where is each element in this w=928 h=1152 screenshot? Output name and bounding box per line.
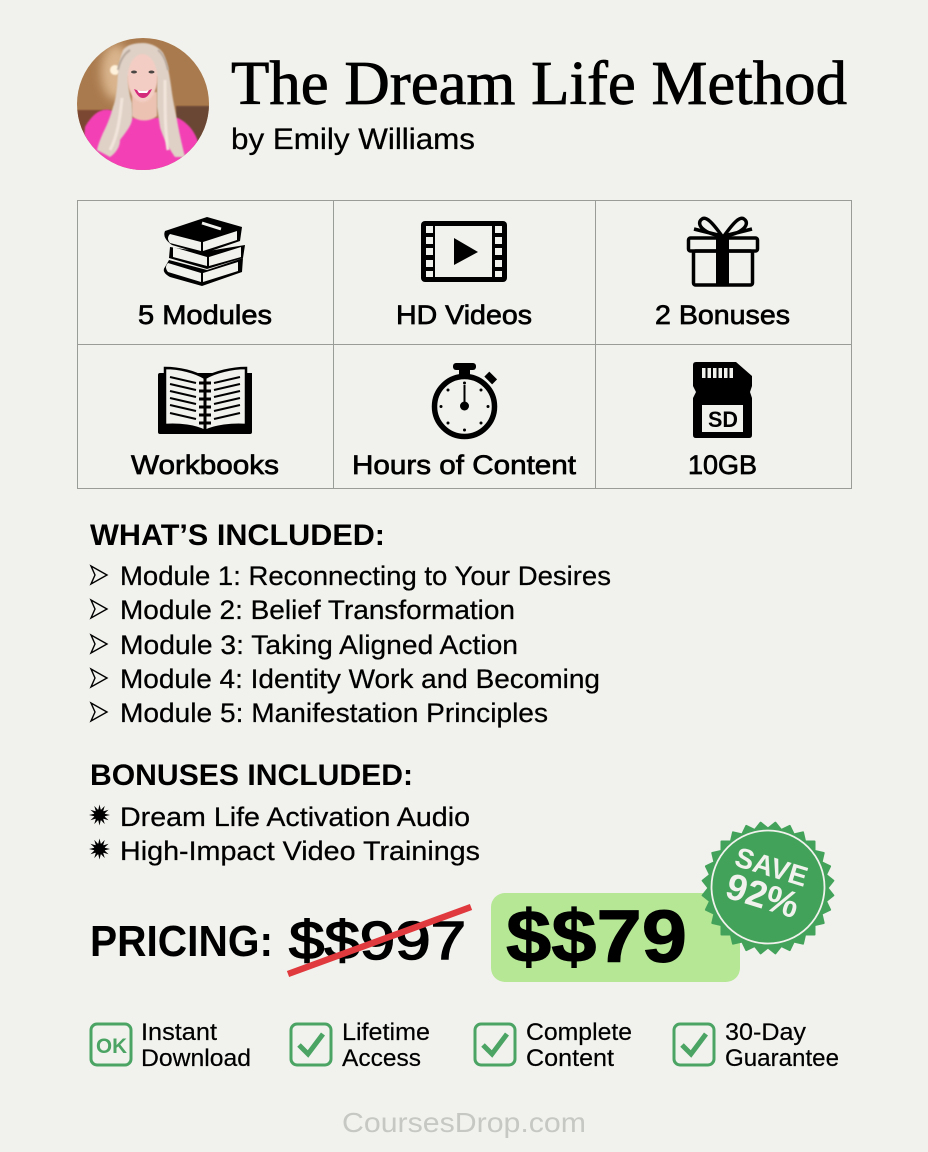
icon: open workbook bbox=[158, 368, 252, 434]
feature: complete content: Complete bbox=[526, 1019, 632, 1046]
feature: 30-day guarantee: 30-Day bbox=[725, 1019, 806, 1046]
feature: instant download bbox=[91, 1019, 251, 1072]
feature: 30-day guarantee: Guarantee bbox=[725, 1045, 839, 1072]
icon: stopwatch bbox=[434, 363, 497, 436]
feature: lifetime access: Access bbox=[342, 1045, 421, 1072]
feature grid bbox=[77, 200, 852, 488]
pricing label: PRICING: bbox=[90, 917, 273, 966]
label: Hours of Content: Hours of Content bbox=[352, 450, 577, 480]
bonus list: High-Impact Video Trainings bbox=[120, 836, 480, 866]
badge: save 92%: 92% bbox=[721, 865, 804, 926]
title: The Dream Life Method bbox=[231, 50, 847, 118]
feature: 30-day guarantee bbox=[674, 1019, 839, 1072]
feature: instant download: Download bbox=[141, 1045, 251, 1072]
module list: Module 3: Taking Aligned Action bbox=[120, 630, 518, 660]
label: Workbooks: Workbooks bbox=[131, 450, 279, 480]
module list: Module 2: Belief Transformation bbox=[120, 595, 515, 625]
new price highlight bbox=[491, 893, 740, 982]
feature: instant download: OK bbox=[96, 1035, 127, 1058]
feature: instant download: Instant bbox=[141, 1019, 217, 1046]
label: HD Videos: HD Videos bbox=[396, 300, 532, 330]
module list: Module 1: Reconnecting to Your Desires bbox=[120, 561, 611, 591]
icon: SD card bbox=[693, 362, 752, 438]
feature: complete content bbox=[475, 1019, 632, 1072]
heading: bonuses included: BONUSES INCLUDED: bbox=[90, 759, 413, 792]
module list bbox=[91, 561, 611, 728]
bonus list: Dream Life Activation Audio bbox=[120, 802, 470, 832]
module list: Module 5: Manifestation Principles bbox=[120, 698, 548, 728]
module list: Module 4: Identity Work and Becoming bbox=[120, 664, 600, 694]
label: 10GB: 10GB bbox=[688, 450, 757, 480]
author portrait photo bbox=[77, 38, 212, 175]
feature: complete content: Content bbox=[526, 1045, 614, 1072]
old price struck through: $$997 bbox=[289, 911, 466, 971]
icon: gift box bbox=[688, 218, 758, 286]
badge: save 92% bbox=[701, 821, 835, 955]
bonus list bbox=[89, 802, 480, 866]
label: 5 Modules: 5 Modules bbox=[138, 300, 272, 330]
icon: film strip with play button bbox=[421, 221, 507, 282]
icon: SD card: SD bbox=[708, 407, 738, 432]
feature: lifetime access: Lifetime bbox=[342, 1019, 430, 1046]
heading: what's included: WHAT’S INCLUDED: bbox=[90, 519, 385, 552]
author byline: by Emily Williams bbox=[231, 123, 475, 156]
feature: lifetime access bbox=[291, 1019, 430, 1072]
label: 2 Bonuses: 2 Bonuses bbox=[655, 300, 790, 330]
badge: save 92%: SAVE bbox=[731, 841, 811, 893]
footer watermark: CoursesDrop.com bbox=[342, 1107, 586, 1138]
new price highlight: $$79 bbox=[506, 895, 687, 978]
icon: stack of books bbox=[164, 217, 245, 286]
